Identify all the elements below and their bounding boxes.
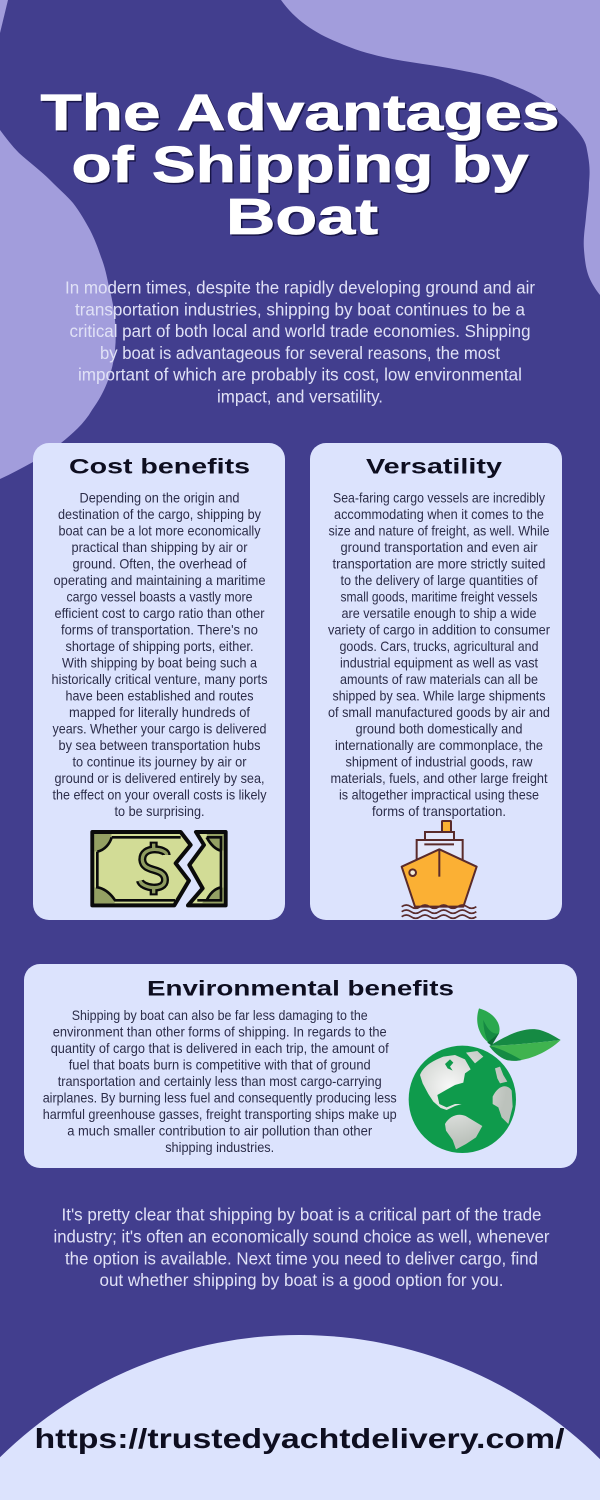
- text: versatility body: size and nature of freight, as well. While: [328, 523, 550, 538]
- text: environmental body: airplanes. By burning less fuel and consequently producing less: [43, 1090, 397, 1106]
- title: of Shipping by: [73, 138, 531, 194]
- text: versatility body: to the delivery of large quantities of: [340, 573, 538, 588]
- text: environmental body: quantity of cargo that is delivered in each trip, the amount of: [51, 1041, 389, 1056]
- text: environmental body: Shipping by boat can also be far less damaging to the: [72, 1008, 368, 1023]
- text: cost benefits body: historically critical venture, many ports: [52, 672, 268, 687]
- text: versatility body: shipped by sea. While large shipments: [332, 688, 546, 703]
- icon: cargo ship: [402, 821, 477, 918]
- footer arc: [0, 1335, 600, 1500]
- text: versatility body: goods. Cars, trucks, agricultural and: [340, 639, 538, 654]
- intro paragraph: impact, and versatility.: [217, 386, 383, 406]
- title: Boat: [226, 188, 378, 245]
- text: versatility body: industrial equipment as well as vast: [340, 655, 538, 670]
- intro paragraph: [65, 278, 535, 406]
- text: environmental body: shipping industries.: [165, 1140, 274, 1155]
- icon: globe with leaves: [409, 1008, 561, 1153]
- text: cost benefits body: have been established and routes: [66, 688, 254, 703]
- text: environmental body: transportation and certainly less than most cargo-carrying: [58, 1074, 382, 1089]
- text: cost benefits body: efficient cost to cargo ratio than other: [54, 606, 265, 621]
- closing paragraph: industry; it's often an economically sound choice as well, whenever: [54, 1226, 550, 1246]
- text: environmental body: harmful greenhouse gasses, freight transporting ships make up: [43, 1107, 397, 1122]
- text: versatility body: transportation are more strictly suited: [332, 556, 546, 571]
- text: versatility body: Sea-faring cargo vessels are incredibly: [333, 490, 545, 505]
- text: cost benefits body: [52, 490, 268, 819]
- text: versatility body: variety of cargo in addition to consumer: [328, 622, 550, 637]
- intro paragraph: transportation industries, shipping by boat continues to be a: [75, 299, 525, 319]
- text: environmental body: a much smaller contribution to air pollution than other: [67, 1124, 373, 1138]
- text: cost benefits body: to continue its journey by air or: [72, 754, 247, 769]
- closing paragraph: It's pretty clear that shipping by boat is a critical part of the trade: [62, 1205, 542, 1225]
- blob: left: [0, 130, 116, 479]
- text: versatility body: amounts of raw materials can all be: [340, 672, 538, 687]
- text: versatility body: shipment of industrial goods, raw: [346, 754, 533, 769]
- text: versatility body: is altogether impractical using these: [339, 787, 539, 802]
- title: The Advantages: [42, 86, 561, 142]
- text: cost benefits body: shortage of shipping ports, either.: [66, 639, 254, 654]
- closing paragraph: out whether shipping by boat is a good option for you.: [100, 1270, 504, 1290]
- text: cost benefits body: years. Whether your cargo is delivered: [52, 721, 266, 736]
- icon: torn dollar bill: [92, 832, 226, 905]
- text: cost benefits body: boat can be a lot more economically: [58, 523, 261, 538]
- intro paragraph: critical part of both local and world trade economies. Shipping: [70, 321, 530, 341]
- text: versatility body: accommodating when it comes to the: [334, 507, 544, 522]
- heading: cost benefits: Cost benefits: [69, 454, 250, 478]
- heading: versatility: Versatility: [366, 454, 502, 478]
- closing paragraph: the option is available. Next time you need to deliver cargo, find: [65, 1248, 538, 1268]
- text: cost benefits body: to be surprising.: [114, 804, 204, 819]
- closing paragraph: [54, 1205, 550, 1290]
- intro paragraph: In modern times, despite the rapidly developing ground and air: [65, 278, 535, 298]
- title: of Shipping by: [72, 136, 529, 193]
- text: cost benefits body: ground or is delivered entirely by sea,: [54, 771, 264, 786]
- title: Boat: [228, 190, 380, 246]
- text: cost benefits body: With shipping by boat being such a: [62, 655, 257, 670]
- title: [40, 84, 561, 246]
- blob: top right: [281, 0, 600, 295]
- footer url: https://trustedyachtdelivery.com/: [34, 1423, 565, 1454]
- panel: environmental benefits: [24, 964, 577, 1168]
- text: versatility body: ground transportation and even air: [340, 540, 538, 555]
- text: cost benefits body: cargo vessel boasts a vastly more: [66, 589, 253, 604]
- text: versatility body: forms of transportation.: [372, 804, 506, 819]
- text: cost benefits body: destination of the cargo, shipping by: [58, 507, 261, 522]
- text: cost benefits body: Depending on the origin and: [80, 490, 240, 505]
- text: cost benefits body: practical than shipping by air or: [72, 540, 248, 555]
- heading: environmental benefits: Environmental benefits: [147, 977, 454, 1001]
- text: cost benefits body: forms of transportation. There's no: [61, 622, 258, 637]
- text: versatility body: of small manufactured goods by air and: [328, 705, 550, 720]
- text: environmental body: [43, 1008, 397, 1155]
- panel: versatility: [310, 443, 562, 920]
- blob: top left corner: [0, 0, 8, 33]
- text: versatility body: materials, fuels, and other large freight: [330, 771, 548, 786]
- text: cost benefits body: mapped for literally hundreds of: [69, 705, 250, 720]
- text: cost benefits body: the effect on your overall costs is likely: [52, 787, 267, 802]
- panel: cost benefits: [33, 443, 285, 920]
- text: versatility body: [328, 490, 550, 819]
- text: versatility body: small goods, maritime freight vessels: [340, 589, 538, 604]
- intro paragraph: by boat is advantageous for several reasons, the most: [100, 343, 500, 363]
- text: versatility body: ground both domestically and: [356, 721, 522, 736]
- text: versatility body: internationally are commonplace, the: [335, 738, 543, 753]
- text: cost benefits body: by sea between transportation hubs: [58, 738, 261, 753]
- text: versatility body: are versatile enough to ship a wide: [342, 606, 537, 621]
- text: environmental body: environment than other forms of shipping. In regards to the: [53, 1024, 387, 1040]
- title: The Advantages: [40, 84, 560, 141]
- text: cost benefits body: ground. Often, the overhead of: [72, 556, 247, 571]
- text: environmental body: fuel that boats burn is competitive with that of ground: [69, 1058, 371, 1072]
- intro paragraph: important of which are probably its cost, low environmental: [78, 365, 522, 385]
- text: cost benefits body: operating and maintaining a maritime: [54, 573, 266, 588]
